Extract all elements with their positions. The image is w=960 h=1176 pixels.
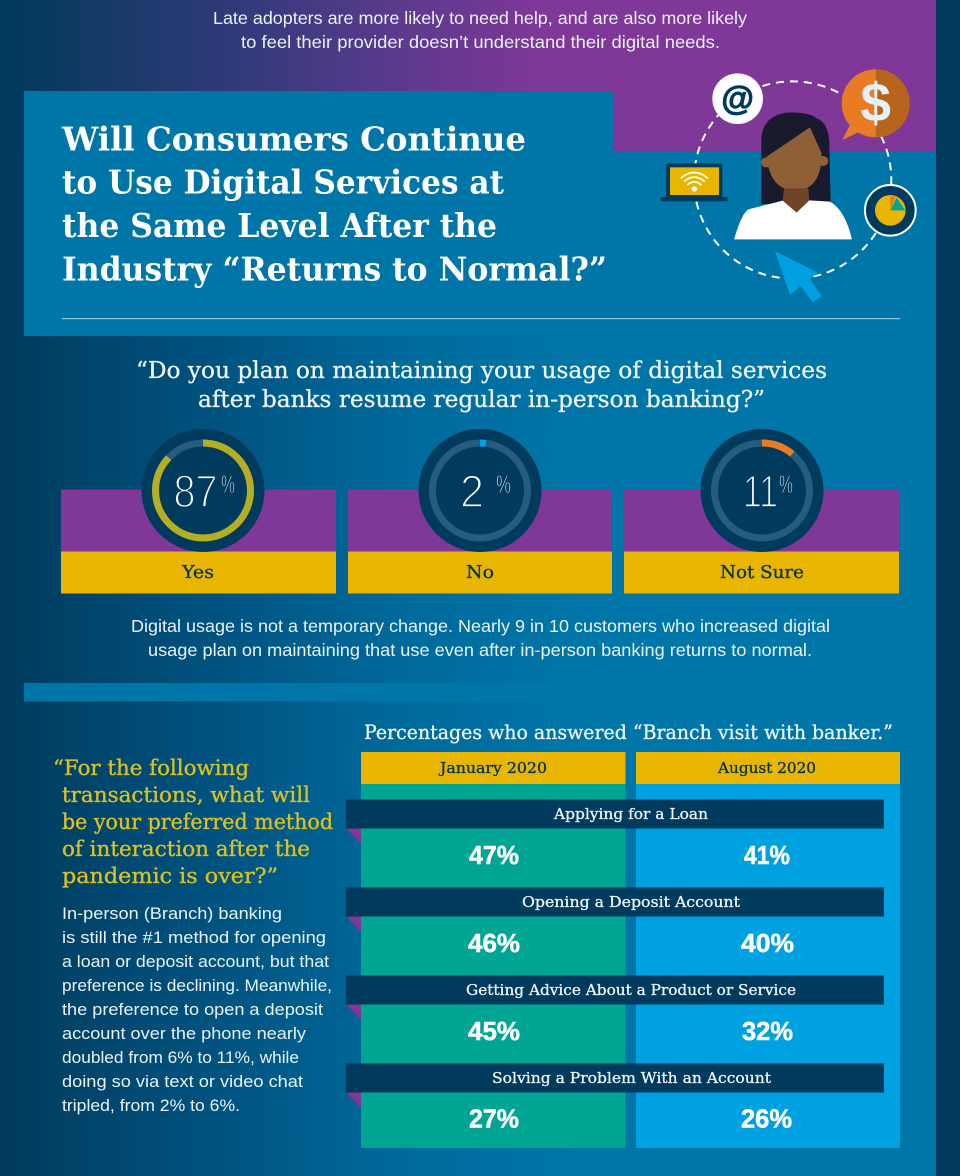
row: Solving a Problem With an Account: 26%	[741, 1104, 792, 1134]
row: Solving a Problem With an Account: 27%	[469, 1104, 519, 1134]
row: Getting Advice About a Product or Service: 32%	[742, 1016, 793, 1046]
row: Getting Advice About a Product or Service	[346, 976, 884, 1046]
title: Will Consumers Continue	[61, 120, 526, 158]
transactions body text: is still the #1 method for opening	[62, 929, 326, 947]
panel: No 2%	[348, 429, 612, 594]
row: Solving a Problem With an Account	[346, 1064, 884, 1134]
row: Applying for a Loan	[346, 800, 884, 870]
row: Applying for a Loan: 47%	[469, 840, 519, 870]
transactions body text: doing so via text or video chat	[62, 1073, 303, 1091]
transactions body text: a loan or deposit account, but that	[62, 953, 329, 971]
table: branch visit percentages	[346, 752, 900, 1148]
column: August 2020: August 2020	[717, 759, 816, 777]
icon: at sign: @	[721, 80, 754, 117]
transactions question heading: “For the following	[53, 756, 249, 781]
icon: cursor arrow	[775, 251, 822, 302]
question heading: “Do you plan on maintaining your usage of digital services	[136, 358, 827, 384]
transactions question heading: of interaction after the	[62, 837, 310, 862]
column: August 2020	[636, 752, 900, 1148]
icon: laptop with wifi	[661, 163, 728, 201]
panel: Yes 87%: Yes	[181, 562, 214, 583]
panel: title background	[24, 91, 936, 336]
title	[61, 120, 607, 288]
icon: dollar speech bubble	[842, 69, 910, 140]
transactions question heading: transactions, what will	[62, 783, 310, 808]
panel: No 2%: 2	[460, 466, 484, 517]
panel: Not Sure 11%: 11	[743, 466, 778, 517]
panel: Not Sure 11%	[624, 429, 899, 594]
row: Applying for a Loan: Applying for a Loan	[553, 805, 708, 823]
section divider bar	[24, 683, 936, 702]
icon: at sign	[712, 73, 763, 124]
row: Solving a Problem With an Account: Solving a Problem With an Account	[492, 1069, 771, 1087]
transactions body text: In-person (Branch) banking	[62, 905, 282, 923]
intro text: Late adopters are more likely to need help, and are also more likely	[213, 8, 747, 28]
column: January 2020	[361, 752, 626, 1148]
row: Getting Advice About a Product or Service: Getting Advice About a Product or Service	[466, 981, 796, 999]
question heading: after banks resume regular in-person banking?”	[198, 387, 765, 413]
transactions body text: doubled from 6% to 11%, while	[62, 1049, 299, 1067]
panel: Yes 87%: %	[221, 471, 235, 499]
title divider	[62, 318, 900, 319]
title: the Same Level After the	[62, 206, 497, 245]
row: Getting Advice About a Product or Service: 45%	[468, 1016, 520, 1046]
panel: Not Sure 11%: Not Sure	[720, 562, 804, 583]
title: to Use Digital Services at	[62, 162, 505, 202]
icon: pie chart	[865, 185, 916, 236]
panel: Yes 87%	[61, 429, 336, 594]
transactions question heading: be your preferred method	[62, 810, 333, 835]
row: Opening a Deposit Account	[346, 888, 884, 958]
illustration: person with digital icons	[661, 69, 916, 302]
title: Industry “Returns to Normal?”	[62, 250, 607, 288]
icon: person	[734, 112, 852, 239]
column: January 2020: January 2020	[438, 759, 547, 777]
transactions body text: the preference to open a deposit	[62, 1001, 323, 1019]
transactions question heading	[53, 756, 333, 889]
dashed orbit	[694, 81, 891, 279]
icon: dollar speech bubble: $	[860, 71, 891, 133]
panel: No 2%: No	[466, 562, 494, 583]
right dark stripe	[936, 0, 960, 1176]
question heading	[136, 358, 827, 413]
row: Opening a Deposit Account: Opening a Deposit Account	[522, 893, 740, 911]
digital usage text: Digital usage is not a temporary change. Nearly 9 in 10 customers who increased digital	[131, 616, 830, 636]
transactions body text: account over the phone nearly	[62, 1025, 307, 1043]
digital usage text	[131, 616, 830, 660]
intro text	[213, 8, 747, 52]
row: Opening a Deposit Account: 46%	[468, 928, 520, 958]
row: Opening a Deposit Account: 40%	[741, 928, 794, 958]
transactions question heading: pandemic is over?”	[62, 864, 278, 889]
transactions body text: preference is declining. Meanwhile,	[62, 977, 332, 995]
panel: Yes 87%: 87	[174, 466, 218, 517]
transactions body text: tripled, from 2% to 6%.	[62, 1097, 240, 1115]
row: Applying for a Loan: 41%	[744, 840, 790, 870]
table heading: Percentages who answered “Branch visit with banker.”	[364, 721, 893, 744]
panel: Not Sure 11%: %	[779, 471, 793, 499]
digital usage text: usage plan on maintaining that use even after in-person banking returns to normal.	[148, 640, 812, 660]
panel: No 2%: %	[496, 471, 511, 499]
intro text: to feel their provider doesn’t understand their digital needs.	[241, 32, 720, 52]
panel: purple top band	[0, 0, 936, 152]
transactions body text	[62, 905, 332, 1115]
